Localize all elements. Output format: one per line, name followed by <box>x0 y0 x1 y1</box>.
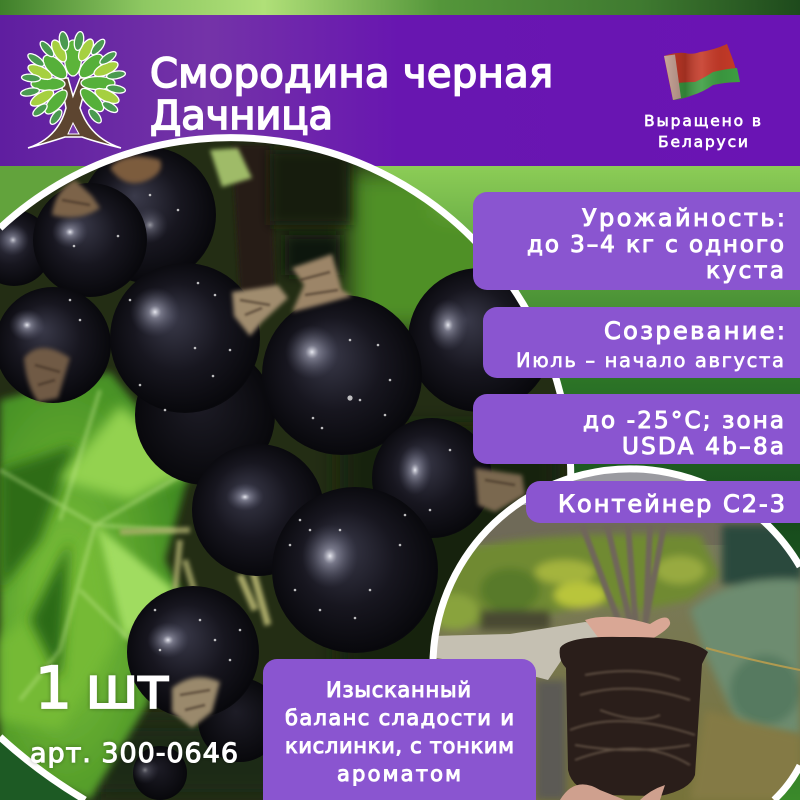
flag caption: Выращено в <box>644 112 761 130</box>
panel: frost hardiness: до -25°С; зона <box>583 408 784 434</box>
panel: frost hardiness <box>473 394 800 464</box>
main photo white ring <box>0 138 571 800</box>
panel: container <box>526 481 800 523</box>
title: Смородина черная <box>150 51 553 97</box>
title <box>150 51 553 139</box>
panel: yield <box>473 192 800 290</box>
root ball <box>560 637 708 796</box>
panel: taste description <box>263 659 536 800</box>
berries front row <box>0 180 525 728</box>
panel: ripening: Созревание: <box>604 317 785 345</box>
ground <box>690 710 800 800</box>
panel: taste description: ароматом <box>337 762 461 786</box>
sky and fence <box>522 472 686 505</box>
panel: container: Контейнер С2-3 <box>558 490 785 518</box>
header band <box>0 15 800 166</box>
yellow wire <box>706 648 800 670</box>
flag caption <box>644 112 761 151</box>
title: Дачница <box>150 93 333 139</box>
calyx texture <box>35 200 515 710</box>
berry stalks <box>240 568 268 625</box>
quantity label: 1 шт <box>35 654 170 722</box>
panel: yield: до 3–4 кг с одного <box>527 232 784 258</box>
tree leaves <box>20 31 126 126</box>
panel: taste description: кислинки, с тонким <box>285 734 514 758</box>
lower hand <box>560 784 665 800</box>
stem <box>232 145 275 295</box>
panel: ripening: Июль – начало августа <box>516 349 784 372</box>
panel: yield: куста <box>706 258 784 284</box>
leaf <box>0 372 200 800</box>
photo background greens <box>90 150 560 800</box>
panel: frost hardiness: USDA 4b–8a <box>622 434 784 460</box>
logo: tree <box>20 31 126 148</box>
round photo: plant in container <box>430 460 800 800</box>
panel: taste description: Изысканный <box>326 678 471 702</box>
shrubs <box>431 534 720 630</box>
stems <box>582 525 664 630</box>
juniper <box>690 525 800 735</box>
panel: taste description: баланс сладости и <box>285 706 514 730</box>
berries back row <box>0 147 552 800</box>
icon: Belarus flag <box>664 44 740 100</box>
article number: арт. 300-0646 <box>30 738 238 769</box>
tree trunk <box>28 78 121 148</box>
arm and hand <box>436 622 598 680</box>
panel: ripening <box>483 307 800 378</box>
panel: yield: Урожайность: <box>582 204 785 232</box>
flag caption: Беларуси <box>658 133 748 151</box>
berry specks <box>69 194 451 661</box>
main photo: blackcurrant berries <box>0 130 570 800</box>
